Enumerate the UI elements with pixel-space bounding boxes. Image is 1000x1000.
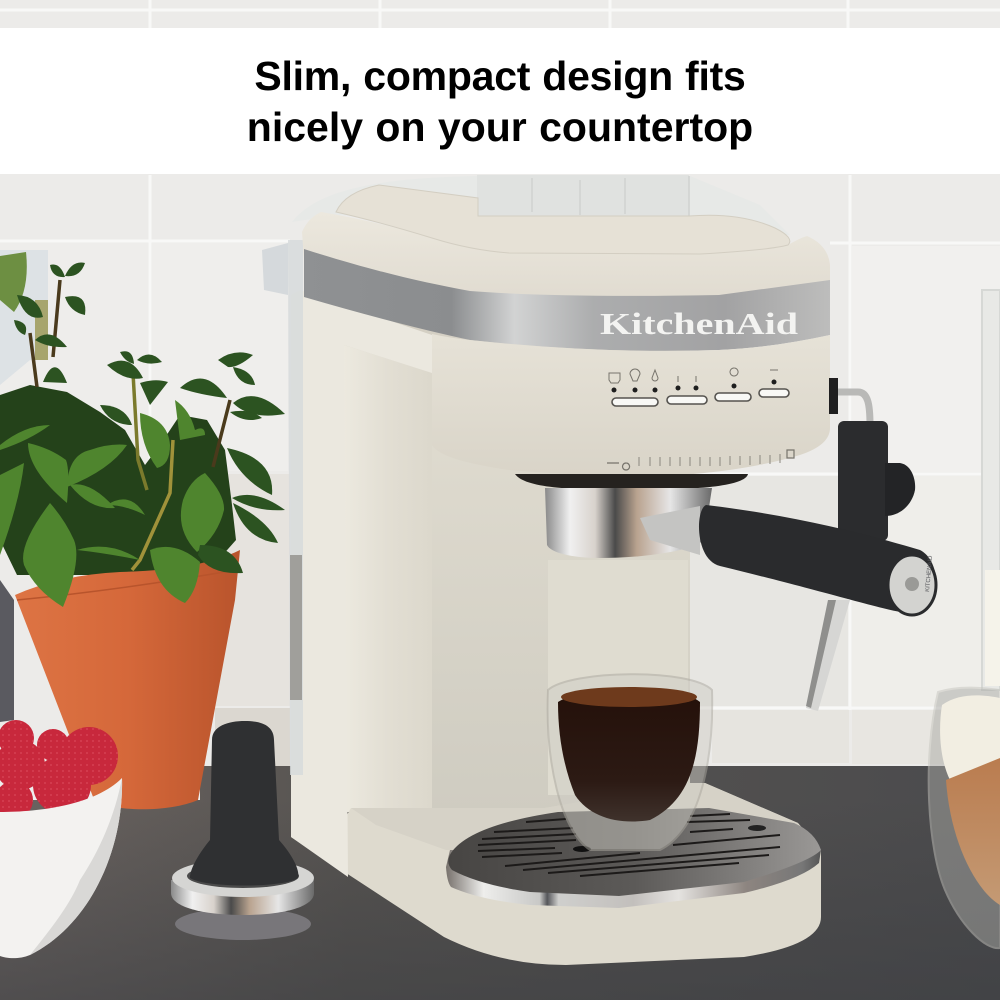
machine base and drip tray (291, 783, 821, 965)
counter top (0, 766, 1000, 1000)
espresso glass (548, 674, 712, 850)
plant: stems (30, 280, 230, 570)
base top surface (351, 783, 798, 850)
handle end cap lettering: KITCHENAID (925, 555, 934, 592)
water tank lid and cups on top (262, 175, 790, 295)
control icons (609, 368, 778, 383)
tank latch clip (262, 243, 288, 295)
plant: bright leaves (0, 400, 224, 560)
title: Slim, compact design fits (254, 53, 746, 99)
grate slots (478, 814, 780, 876)
base body (291, 783, 821, 965)
leaf-shaped tile reflection (0, 250, 48, 385)
indicator dots (612, 380, 776, 392)
KitchenAid logo: KitchenAid (600, 306, 798, 341)
background glass at right edge (982, 290, 1000, 690)
title: nicely on your countertop (247, 104, 753, 150)
chrome band with logo (304, 249, 830, 351)
title (247, 53, 753, 150)
lower housing (302, 212, 830, 300)
upper dome lid (336, 185, 790, 254)
tiled wall background (0, 0, 1000, 780)
machine head with control panel (432, 334, 830, 476)
plant: dark foliage mass (0, 385, 236, 575)
grind scale (639, 454, 780, 466)
machine column body (300, 320, 690, 812)
plant (0, 263, 285, 575)
tray chrome rim (446, 850, 821, 908)
latte glass at right (929, 688, 1000, 948)
left bright side of machine column (291, 290, 432, 877)
steam wand (806, 378, 915, 711)
leaves hanging over the pot rim (23, 503, 243, 607)
control buttons (612, 389, 789, 406)
clear water tank strip (288, 240, 303, 775)
tamper (171, 721, 314, 940)
plant: dark leaves (14, 263, 285, 543)
tray top grate (448, 808, 821, 896)
portafilter with handle (515, 474, 936, 615)
terracotta pot (0, 503, 243, 809)
headline band (0, 28, 1000, 174)
raspberries in white bowl (0, 720, 122, 958)
machine top housing (302, 185, 830, 300)
